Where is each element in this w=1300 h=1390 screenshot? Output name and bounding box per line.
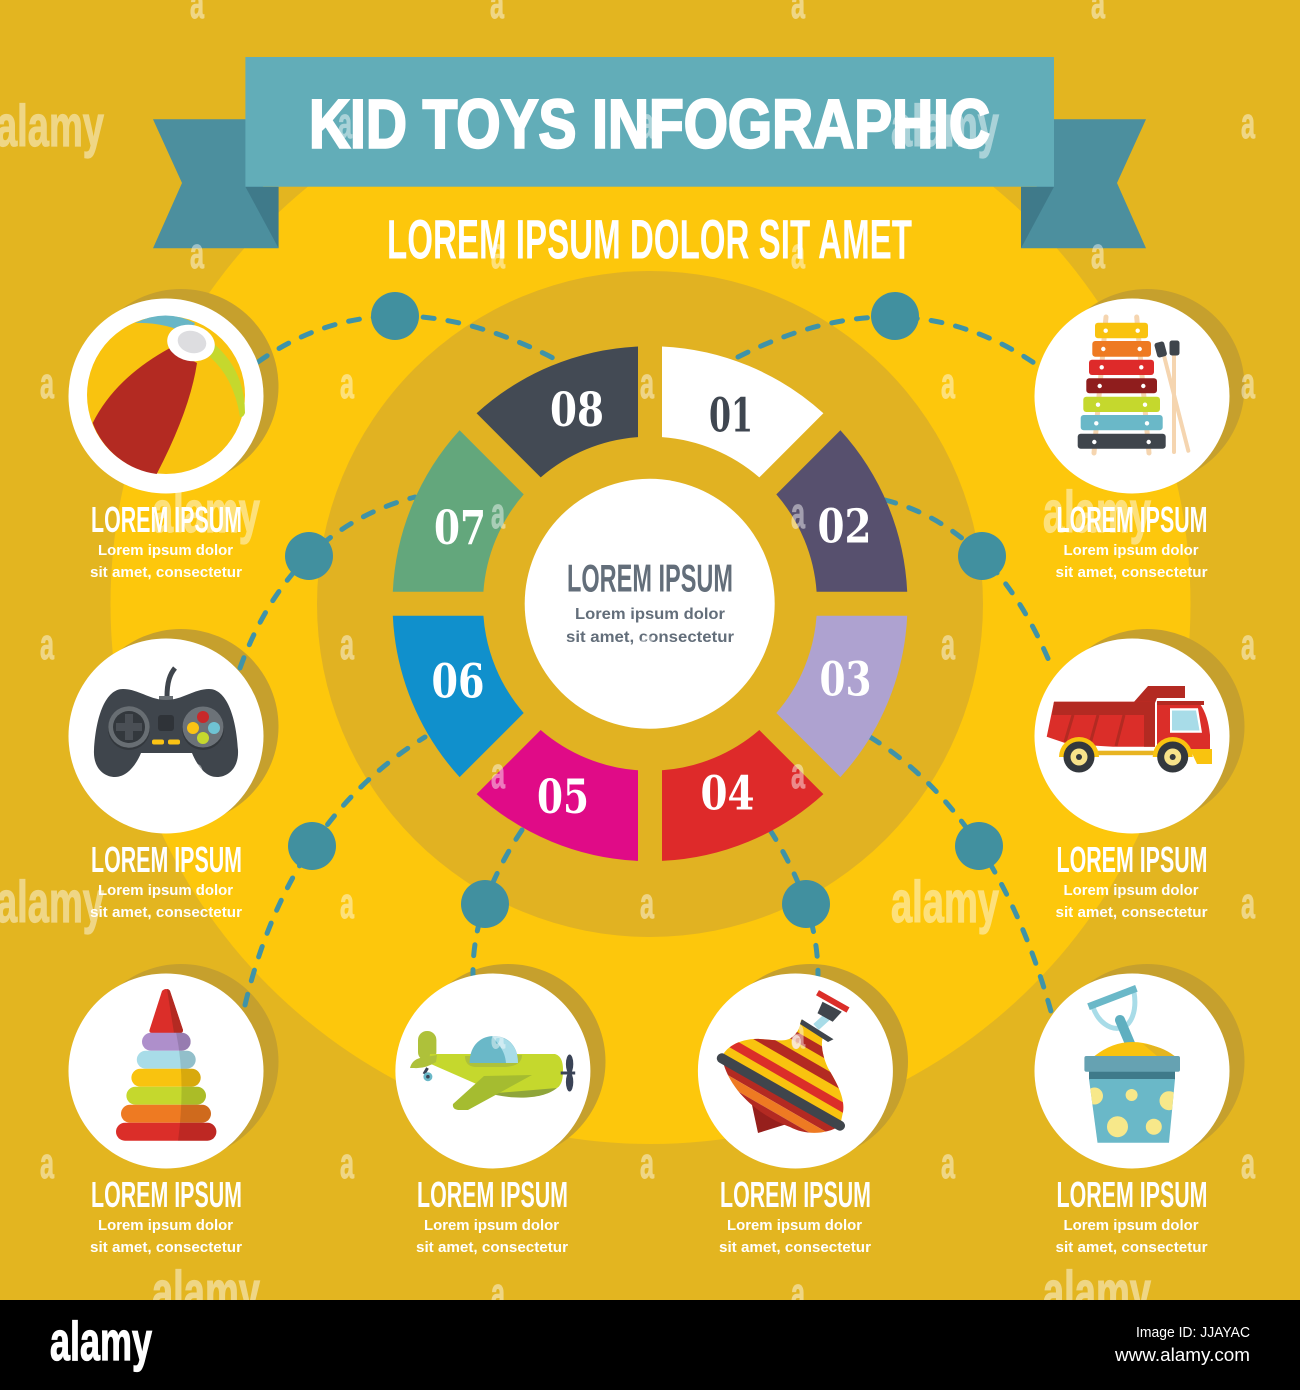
watermark: a bbox=[1241, 879, 1255, 928]
watermark: alamy bbox=[152, 480, 260, 545]
banner tail left bbox=[153, 119, 279, 248]
label: xylophone: sit amet, consectetur bbox=[1056, 564, 1208, 581]
label: spinning top: LOREM IPSUM bbox=[720, 1174, 871, 1215]
label: xylophone bbox=[1056, 499, 1208, 581]
title: KID TOYS INFOGRAPHIC bbox=[309, 86, 990, 162]
center heading: LOREM IPSUM bbox=[567, 558, 733, 600]
watermark: a bbox=[491, 489, 505, 538]
label: beach ball bbox=[90, 499, 242, 581]
watermark: a bbox=[340, 879, 354, 928]
title banner bbox=[153, 57, 1146, 248]
watermark: a bbox=[640, 620, 654, 669]
label: spinning top: Lorem ipsum dolor bbox=[727, 1217, 862, 1234]
watermark: a bbox=[1091, 749, 1105, 798]
watermark: a bbox=[491, 229, 505, 278]
watermark: a bbox=[640, 359, 654, 408]
watermark: a bbox=[40, 620, 54, 669]
label: spinning top: sit amet, consectetur bbox=[719, 1239, 871, 1256]
number 06: 06 bbox=[432, 655, 484, 710]
segment 06 bbox=[393, 616, 524, 777]
label: plane: sit amet, consectetur bbox=[416, 1239, 568, 1256]
label: gamepad bbox=[90, 839, 242, 921]
segment 07 bbox=[393, 430, 524, 592]
number 04: 04 bbox=[700, 766, 754, 822]
segment 05 bbox=[477, 730, 638, 861]
watermark: a bbox=[491, 1269, 505, 1318]
label: dump truck bbox=[1056, 839, 1208, 921]
watermark: a bbox=[40, 1139, 54, 1188]
watermark: a bbox=[338, 99, 352, 148]
label: dump truck: sit amet, consectetur bbox=[1056, 904, 1208, 921]
label: pyramid: LOREM IPSUM bbox=[91, 1174, 242, 1215]
inner ring bbox=[317, 271, 983, 937]
watermark: alamy bbox=[152, 1260, 260, 1325]
label: pyramid: Lorem ipsum dolor bbox=[98, 1217, 233, 1234]
large yellow circle bbox=[110, 64, 1190, 1144]
segment 08 bbox=[477, 346, 638, 477]
number 03: 03 bbox=[820, 652, 872, 708]
center circle: sit amet, consectetur bbox=[566, 629, 734, 646]
subtitle: LOREM IPSUM DOLOR SIT AMET bbox=[387, 208, 912, 270]
label: beach ball: LOREM IPSUM bbox=[91, 499, 242, 540]
watermark: a bbox=[791, 1009, 805, 1058]
label: plane: LOREM IPSUM bbox=[417, 1174, 568, 1215]
watermark: a bbox=[1241, 1139, 1255, 1188]
label: gamepad: sit amet, consectetur bbox=[90, 904, 242, 921]
segment 04 bbox=[662, 730, 823, 861]
number 08: 08 bbox=[550, 383, 604, 438]
watermark: a bbox=[491, 1009, 505, 1058]
watermark: a bbox=[340, 620, 354, 669]
watermark: a bbox=[791, 749, 805, 798]
watermark: alamy bbox=[1043, 1260, 1151, 1325]
label: bucket: Lorem ipsum dolor bbox=[1064, 1217, 1199, 1234]
watermark: alamy bbox=[1043, 480, 1151, 545]
icon: beach ball bbox=[68, 298, 264, 494]
watermark: a bbox=[40, 359, 54, 408]
watermark: a bbox=[640, 879, 654, 928]
footer bar bbox=[0, 1300, 1300, 1390]
connector nodes bbox=[285, 292, 1006, 928]
label: dump truck: Lorem ipsum dolor bbox=[1064, 882, 1199, 899]
number 02: 02 bbox=[818, 500, 872, 555]
watermark: a bbox=[190, 1009, 204, 1058]
watermark: alamy bbox=[891, 94, 999, 159]
segment 03 bbox=[776, 616, 907, 777]
watermark: a bbox=[1091, 1009, 1105, 1058]
watermark: a bbox=[1241, 620, 1255, 669]
center circle bbox=[525, 479, 775, 729]
watermark: a bbox=[941, 620, 955, 669]
label: pyramid bbox=[90, 1174, 242, 1256]
dashed connectors bbox=[240, 316, 1052, 1015]
watermark: a bbox=[941, 1139, 955, 1188]
icon: stacking rings pyramid bbox=[68, 974, 264, 1168]
label: beach ball: sit amet, consectetur bbox=[90, 564, 242, 581]
segment 02 bbox=[776, 430, 907, 592]
watermark: a bbox=[190, 229, 204, 278]
watermark: alamy bbox=[0, 870, 104, 935]
banner tail right bbox=[1021, 119, 1146, 248]
icon: gamepad bbox=[68, 638, 264, 834]
donut chart bbox=[393, 346, 907, 861]
label: pyramid: sit amet, consectetur bbox=[90, 1239, 242, 1256]
segment 01 bbox=[662, 346, 823, 477]
watermark: a bbox=[190, 749, 204, 798]
center text: Lorem ipsum dolor bbox=[575, 606, 725, 623]
watermark: a bbox=[791, 489, 805, 538]
icon: spinning top bbox=[698, 974, 893, 1168]
label: bucket bbox=[1056, 1174, 1208, 1256]
watermark: a bbox=[791, 1269, 805, 1318]
icon: xylophone bbox=[1034, 298, 1230, 494]
icon disc shadows bbox=[84, 289, 1244, 1159]
label: plane: Lorem ipsum dolor bbox=[424, 1217, 559, 1234]
label: gamepad: Lorem ipsum dolor bbox=[98, 882, 233, 899]
footer logo: alamy bbox=[50, 1310, 152, 1372]
icon: dump truck bbox=[1034, 638, 1230, 834]
label: gamepad: LOREM IPSUM bbox=[91, 839, 242, 880]
icon: sand bucket and shovel bbox=[1034, 974, 1230, 1168]
watermark: alamy bbox=[891, 870, 999, 935]
label: bucket: sit amet, consectetur bbox=[1056, 1239, 1208, 1256]
label: xylophone: Lorem ipsum dolor bbox=[1064, 542, 1199, 559]
number 01: 01 bbox=[709, 388, 753, 443]
watermark: a bbox=[1091, 229, 1105, 278]
watermark: a bbox=[791, 229, 805, 278]
label: plane bbox=[416, 1174, 568, 1256]
watermark: a bbox=[941, 359, 955, 408]
watermark: alamy bbox=[0, 94, 104, 159]
watermark: a bbox=[1241, 99, 1255, 148]
watermark: a bbox=[1241, 359, 1255, 408]
label: beach ball: Lorem ipsum dolor bbox=[98, 542, 233, 559]
number 07: 07 bbox=[434, 501, 486, 556]
website: www.alamy.com bbox=[1114, 1345, 1250, 1365]
image id: Image ID: JJAYAC bbox=[1136, 1324, 1250, 1341]
watermark: a bbox=[340, 1139, 354, 1188]
watermark: a bbox=[340, 359, 354, 408]
watermark: a bbox=[640, 99, 654, 148]
watermark: a bbox=[640, 1139, 654, 1188]
watermark: a bbox=[491, 749, 505, 798]
label: spinning top bbox=[719, 1174, 871, 1256]
icon: toy plane bbox=[395, 974, 590, 1168]
number 05: 05 bbox=[537, 770, 589, 825]
